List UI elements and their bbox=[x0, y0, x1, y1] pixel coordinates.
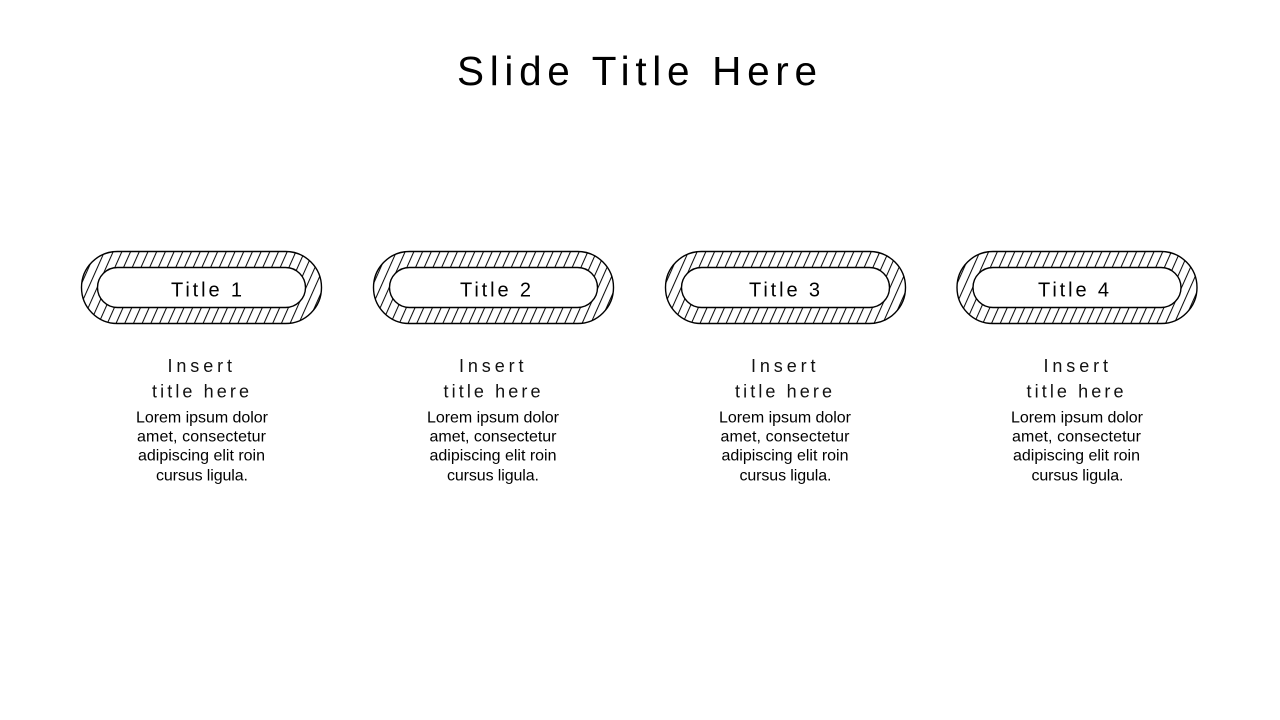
subheading: Insert bbox=[1044, 356, 1108, 376]
body text: adipiscing elit roin bbox=[138, 448, 265, 464]
subheading: title here bbox=[444, 382, 540, 402]
body text: amet, consectetur bbox=[720, 428, 850, 446]
body text: adipiscing elit roin bbox=[1013, 448, 1140, 464]
pill: Title 3: Title 3 bbox=[749, 280, 820, 302]
body text: cursus ligula. bbox=[740, 468, 832, 484]
subheading: title here bbox=[1026, 382, 1124, 402]
body text: amet, consectetur bbox=[1012, 428, 1142, 446]
subheading: Insert bbox=[459, 356, 524, 376]
subheading: Insert bbox=[751, 356, 816, 376]
panel: column 1 bbox=[82, 252, 322, 484]
subheading bbox=[1026, 356, 1124, 402]
body text bbox=[719, 410, 852, 484]
body text bbox=[427, 410, 560, 484]
subheading bbox=[152, 356, 249, 402]
body text bbox=[1011, 410, 1144, 484]
body text: cursus ligula. bbox=[1032, 468, 1124, 484]
subheading bbox=[444, 356, 540, 402]
subheading: Insert bbox=[168, 356, 232, 376]
panel: column 4 bbox=[957, 252, 1197, 484]
subheading bbox=[735, 356, 832, 402]
body text bbox=[136, 410, 269, 484]
body text: amet, consectetur bbox=[137, 428, 267, 446]
body text: adipiscing elit roin bbox=[430, 448, 556, 464]
pill: Title 3 bbox=[666, 252, 906, 324]
pill: Title 1: Title 1 bbox=[171, 280, 242, 302]
pill: Title 4: Title 4 bbox=[1038, 280, 1109, 302]
body text: adipiscing elit roin bbox=[722, 448, 848, 464]
subheading: title here bbox=[735, 382, 832, 402]
pill: Title 2: Title 2 bbox=[460, 280, 531, 302]
pill: Title 1 bbox=[82, 252, 322, 324]
body text: Lorem ipsum dolor bbox=[136, 410, 269, 426]
title: Slide Title Here bbox=[457, 48, 817, 94]
body text: Lorem ipsum dolor bbox=[719, 410, 852, 426]
body text: cursus ligula. bbox=[447, 468, 539, 484]
pill: Title 2 bbox=[374, 252, 614, 324]
subheading: title here bbox=[152, 382, 249, 402]
panel: column 2 bbox=[374, 252, 614, 484]
pill: Title 4 bbox=[957, 252, 1197, 324]
body text: cursus ligula. bbox=[156, 468, 248, 484]
body text: Lorem ipsum dolor bbox=[1011, 410, 1144, 426]
panel: column 3 bbox=[666, 252, 906, 484]
body text: amet, consectetur bbox=[430, 428, 557, 446]
body text: Lorem ipsum dolor bbox=[427, 410, 560, 426]
